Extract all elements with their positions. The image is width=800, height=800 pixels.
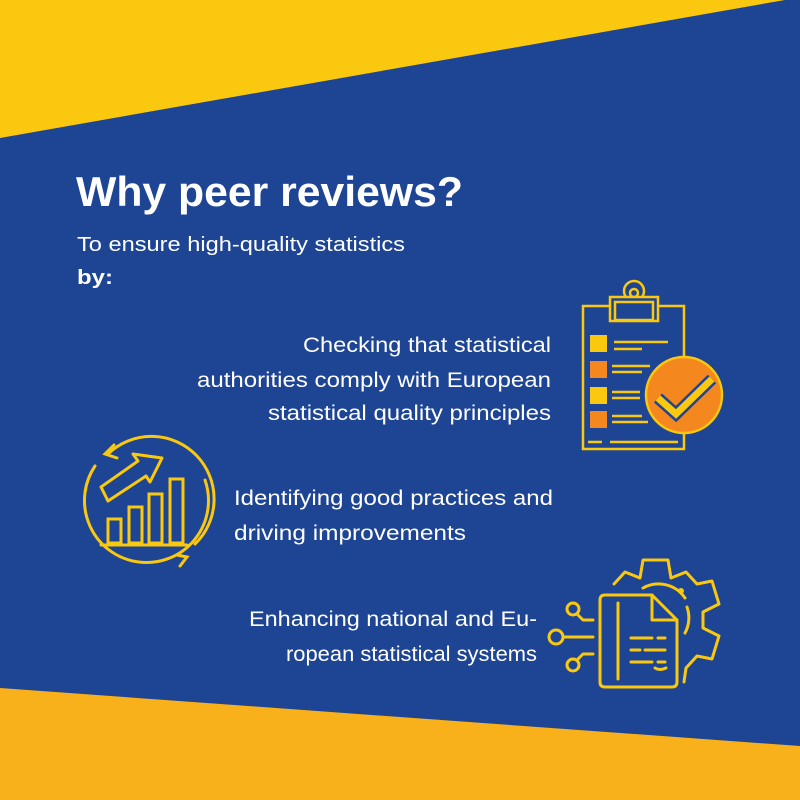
title: Why peer reviews? bbox=[76, 168, 463, 215]
subtitle: To ensure high-quality statistics bbox=[77, 234, 405, 256]
icon: clipboard bbox=[583, 281, 722, 449]
text: checking bbox=[197, 334, 551, 425]
text: identifying: Identifying good practices and bbox=[234, 487, 553, 510]
text: checking: statistical quality principles bbox=[268, 402, 551, 425]
text: enhancing: ropean statistical systems bbox=[286, 643, 537, 666]
text: enhancing: Enhancing national and Eu- bbox=[249, 608, 537, 631]
text: checking: Checking that statistical bbox=[303, 334, 551, 357]
subtitle: by: bbox=[77, 267, 113, 289]
icon: gear document bbox=[549, 560, 719, 687]
top yellow band bbox=[0, 0, 785, 138]
text: identifying: driving improvements bbox=[234, 522, 466, 545]
icon: growth chart bbox=[84, 436, 214, 566]
bottom yellow band bbox=[0, 688, 800, 800]
text: enhancing bbox=[249, 608, 537, 666]
text: checking: authorities comply with European bbox=[197, 369, 551, 392]
text: identifying bbox=[234, 487, 553, 545]
subtitle bbox=[77, 234, 405, 289]
